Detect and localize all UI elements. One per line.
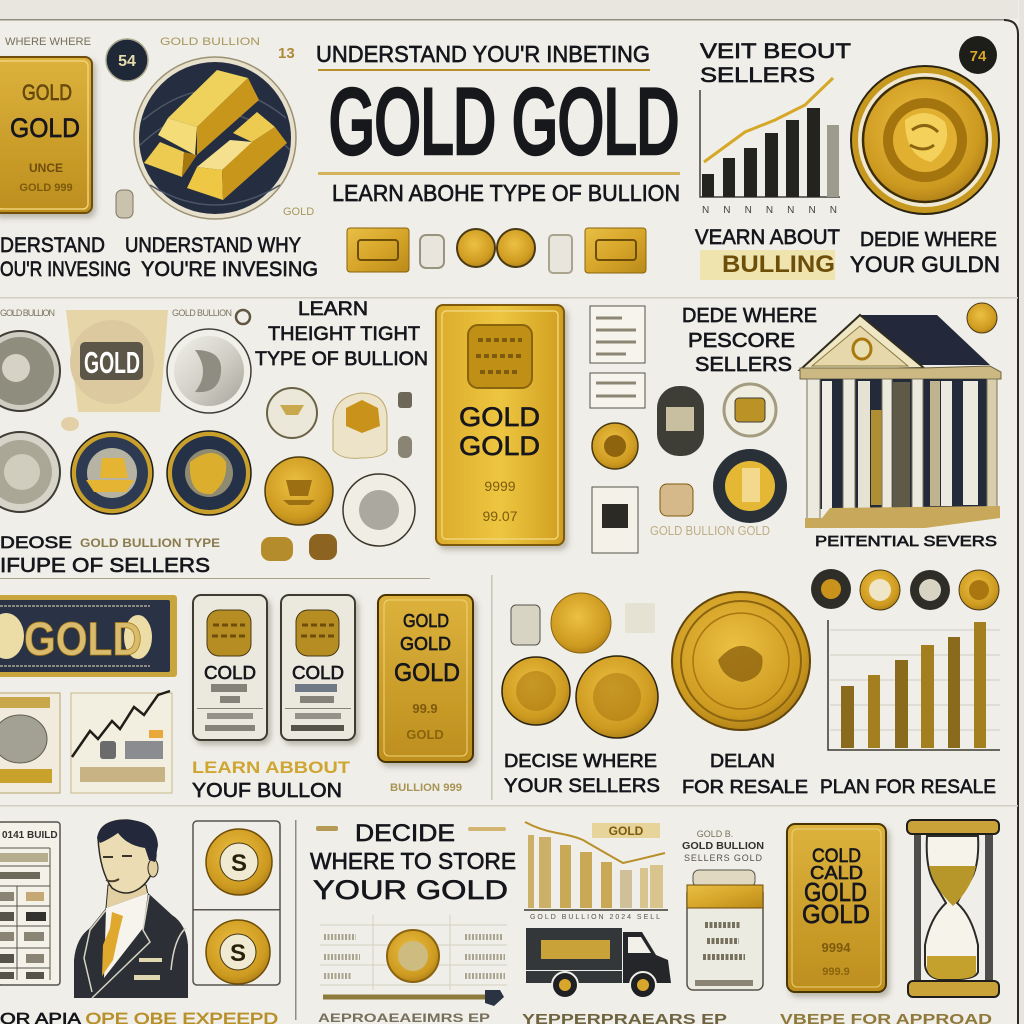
number badge 54: 54: [118, 53, 136, 70]
coins in frames: S: [231, 850, 247, 877]
hair: [97, 820, 158, 862]
heading: learn about bullion: VEARN ABOUT: [695, 226, 840, 249]
kicker: UNDERSTAND YOU'R INBETING: [316, 41, 650, 67]
heading: learn about your bullion: LEARN ABBOUT: [192, 758, 351, 777]
heading: decide where to store: WHERE TO STORE: [310, 848, 516, 874]
heading: decide where: [504, 751, 660, 797]
front right bar: [187, 127, 287, 200]
gold bar: GOLD: [804, 877, 867, 907]
heading: decide where to store: [310, 820, 516, 905]
icon: bank building: [800, 303, 1001, 528]
section: understand why you're investing: [0, 36, 318, 281]
tie: [102, 912, 123, 976]
silver cards: [193, 595, 355, 740]
small icons strip left: GOLD: [283, 206, 314, 218]
heading: learn about bullion: [695, 226, 840, 280]
small coins: GOLD BULLION: [172, 308, 232, 318]
gold sign plate: [0, 595, 177, 677]
gold bar: top left: GOLD: [10, 113, 80, 143]
heading: plan for resale: PLAN FOR RESALE: [820, 777, 996, 798]
bar chart: resale: [828, 620, 1000, 750]
gold bar: GOLD: [406, 727, 444, 742]
gold bar: top left: GOLD: [22, 80, 72, 105]
heading: plan for resale: FOR RESALE: [682, 777, 808, 797]
section: top right coin: [850, 36, 1000, 277]
large center gold bar: [436, 305, 564, 545]
coin row top right: [811, 569, 999, 610]
coin: gold label card: [61, 310, 168, 431]
heading: decide where: YOUR GULDN: [850, 252, 1000, 277]
section: decide sellers coins: [502, 592, 996, 798]
small coin: [967, 303, 997, 333]
heading: understand why: DERSTAND: [0, 234, 105, 257]
heading: learn the type: LEARN: [298, 299, 368, 320]
gold bar: [378, 595, 473, 762]
section: decide where sellers: [590, 305, 817, 553]
heading: learn the type: THEIGHT TIGHT: [268, 324, 420, 345]
storage sketch: [320, 915, 507, 1006]
mouth: [106, 879, 119, 881]
section: storage and sellers: [0, 820, 999, 1006]
table: [0, 822, 60, 985]
gold sign plate: GOLD: [24, 612, 142, 665]
heading: [682, 305, 817, 376]
number badge 74: 74: [970, 48, 987, 65]
small left bar: [144, 142, 197, 177]
bar chart: N N N N N N N: [702, 205, 837, 216]
coin: silver right: [167, 329, 251, 413]
section: learn about your bullion: [0, 595, 473, 802]
number badge 74: [959, 36, 997, 74]
title: gold gold: GOLD GOLD: [329, 71, 679, 173]
large gold coin: [672, 592, 810, 730]
card one: [193, 595, 267, 740]
section: vet sellers chart: [695, 40, 851, 280]
caption: sellers type: GOLD BULLION TYPE: [80, 536, 220, 550]
card two: [281, 595, 355, 740]
heading: understand why: [0, 234, 318, 281]
gold bar: GOLD: [394, 659, 460, 687]
gold bar: top left: UNCE: [29, 161, 63, 175]
heading: learn the type: [255, 299, 428, 370]
gold bar: 99.9: [412, 701, 438, 716]
bar chart: gold: [524, 822, 668, 921]
main title block: [316, 41, 680, 206]
coin: gold dark ring: [71, 432, 153, 514]
heading: decide where: [850, 229, 1000, 277]
large center gold bar: 99.07: [482, 508, 518, 524]
medallions: [592, 384, 787, 538]
heading: learn about your bullion: [192, 758, 462, 802]
heading: SELLERS: [695, 354, 792, 376]
columns: [807, 379, 997, 522]
large center gold bar: GOLD: [459, 402, 540, 432]
small certificates: [590, 306, 645, 553]
lapel lines: [84, 895, 186, 998]
gold bar: top left: GOLD 999: [19, 182, 73, 194]
bar chart: gold: GOLD BULLION 2024 SELL: [530, 914, 660, 921]
section: vet sellers chart: SELLERS: [700, 64, 815, 87]
neck: [106, 885, 148, 912]
heading: understand why: OU'R INVESING: [0, 258, 131, 281]
base: [805, 506, 1000, 528]
pocket squares: [139, 958, 162, 962]
caption: sellers type: DEOSE: [0, 533, 72, 552]
number badge 54: [106, 39, 148, 81]
top bar: [158, 70, 259, 155]
interior: [818, 379, 990, 509]
icon: jar: GOLD BULLION: [682, 841, 764, 852]
gold bar: [787, 824, 886, 992]
caption: sellers type: [0, 533, 430, 579]
heading: decide where: DECISE WHERE: [504, 751, 657, 771]
small icons strip left: 13: [278, 45, 295, 62]
heading: plan for resale: DELAN: [710, 751, 775, 771]
heading: decide where: YOUR SELLERS: [504, 776, 660, 797]
ear: [148, 859, 158, 877]
large center gold bar: GOLD: [459, 431, 540, 461]
heading: PESCORE: [688, 330, 795, 352]
heading: DEDE WHERE: [682, 305, 817, 327]
gold bar: GOLD: [403, 611, 449, 631]
footer text: [0, 1011, 992, 1024]
small coins: [0, 308, 415, 561]
medallions: GOLD BULLION GOLD: [650, 523, 770, 538]
section: coin collection: [0, 299, 430, 579]
caption: sellers type: IFUPE OF SELLERS: [0, 555, 210, 577]
heading: learn about your bullion: BULLION 999: [390, 782, 462, 794]
coin: silver lower left: [0, 432, 60, 512]
heading: decide where to store: YOUR GOLD: [313, 875, 508, 905]
gold bar: top left: [0, 57, 92, 213]
heading: learn about your bullion: YOUF BULLON: [192, 780, 342, 802]
heading: understand why: UNDERSTAND WHY: [125, 234, 301, 257]
icon: delivery truck: [526, 928, 671, 998]
suit: [74, 893, 188, 998]
gold bar: 999.9: [822, 966, 850, 978]
gold bar: CALD: [810, 863, 863, 883]
table: 0141 BUILD: [2, 830, 58, 841]
card one: COLD: [204, 663, 256, 683]
heading: decide where: DEDIE WHERE: [860, 229, 997, 251]
bar chart: gold: GOLD: [609, 824, 644, 838]
icon: gold bars in dark circle: [134, 57, 296, 219]
coin: gold navy ring: [167, 431, 251, 515]
icon: jar: [682, 829, 764, 990]
caption: potential sellers: PEITENTIAL SEVERS: [815, 533, 997, 550]
icon: jar: GOLD B.: [697, 829, 733, 839]
bar chart: [700, 78, 840, 216]
shirt and collar: [104, 893, 148, 978]
icon: jar: SELLERS GOLD: [684, 853, 762, 863]
gold bar: 9994: [822, 940, 851, 955]
back right bar: [233, 112, 275, 142]
row of small bullion icons: [347, 228, 646, 273]
entablature: [800, 366, 1001, 379]
icon: large gold coin: [851, 66, 999, 214]
card two: COLD: [292, 663, 344, 683]
heading: plan for resale: [682, 751, 996, 798]
icon: hourglass: [907, 820, 999, 997]
small icons strip left: [5, 36, 314, 218]
heading: understand why: YOU'RE INVESING: [141, 258, 318, 281]
coins in frames: S: [230, 940, 246, 967]
head: [98, 820, 156, 893]
small coins: GOLD BULLION: [0, 308, 55, 318]
heading: VEIT BEOUT: [700, 40, 851, 63]
heading: decide where to store: DECIDE: [355, 820, 455, 847]
subtitle: LEARN ABOHE TYPE OF BULLION: [332, 180, 680, 206]
eyes: [103, 856, 132, 857]
roof: [860, 315, 990, 365]
coins in frames: [193, 821, 280, 985]
gold bar: GOLD: [802, 899, 870, 929]
pediment ornament: [853, 339, 871, 359]
gold bar: GOLD: [400, 634, 451, 654]
coin: silver left: [0, 331, 60, 411]
large center gold bar: 9999: [484, 478, 516, 494]
coins: [502, 593, 658, 738]
small icons strip left: WHERE WHERE: [5, 36, 91, 48]
heading: learn the type: TYPE OF BULLION: [255, 349, 428, 370]
gold bar: COLD: [812, 846, 861, 867]
pediment: [800, 315, 924, 370]
coin: gold label card: GOLD: [84, 345, 140, 380]
small chart cards: [0, 691, 172, 793]
icon: businessman: [74, 820, 188, 998]
heading: learn about bullion: BULLING: [722, 251, 835, 278]
small icons strip left: GOLD BULLION: [160, 36, 260, 48]
